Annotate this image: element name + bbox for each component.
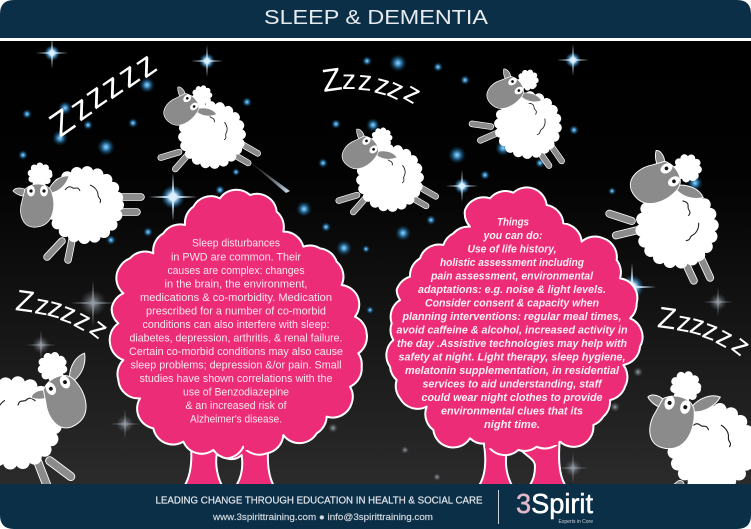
footer strapline: LEADING CHANGE THROUGH EDUCATION IN HEALTH & SOCIAL CARE — [156, 496, 483, 506]
text block: sleep disturbances: diabetes, depression, arthritis, & renal failure. — [130, 333, 342, 345]
text block: sleep disturbances: in PWD are common. Their — [171, 251, 301, 263]
text block: sleep disturbances: conditions can also interfere with sleep: — [142, 319, 330, 331]
header band — [0, 0, 751, 38]
text block: things you can do: adaptations: e.g. noise & light levels. — [418, 284, 606, 296]
snore text: top centre: Zzzzzz — [320, 61, 427, 110]
text block: things you can do: the day .Assistive technologies may help with — [397, 338, 627, 350]
text block: things you can do: Consider consent & capacity when — [425, 298, 599, 310]
text block: things you can do: holistic assessment including — [440, 257, 584, 269]
text block: sleep disturbances: prescribed for a number of co-morbid — [146, 305, 326, 317]
sheep: upper left — [155, 74, 269, 201]
text block: sleep disturbances: causes are complex: changes — [168, 265, 305, 277]
text block: things you can do: you can do: — [483, 230, 543, 242]
text block: things you can do: Things — [497, 217, 529, 229]
sheep: bottom right — [636, 367, 751, 519]
text block: things you can do: avoid caffeine & alcohol, increased activity in — [396, 325, 628, 337]
text block: sleep disturbances: & an increased risk of — [186, 400, 287, 412]
footer — [0, 484, 751, 529]
text block: things you can do: environmental clues that its — [441, 406, 583, 418]
panel: things you can do pink sheep — [386, 187, 643, 485]
footer contact details: www.3spirittraining.com ● info@3spirittraining.com — [212, 512, 433, 523]
text block: things you can do: services to aid understanding, staff — [422, 379, 603, 391]
sheep: bottom left — [0, 342, 111, 500]
text block: sleep disturbances: Certain co-morbid conditions may also cause — [129, 346, 343, 358]
shooting star — [245, 158, 290, 193]
text block: things you can do: melatonin supplementation, in residential — [405, 365, 620, 377]
text block: sleep disturbances: studies have shown correlations with the — [140, 373, 332, 385]
snore text: left: Zzzzzz — [14, 284, 114, 345]
text block: sleep disturbances — [129, 238, 343, 425]
logo: 3Spirit: Experts in Core — [559, 519, 593, 525]
sheep: centre — [333, 116, 447, 244]
text block: things you can do: night time. — [484, 419, 540, 431]
text block: things you can do — [396, 217, 628, 431]
title: SLEEP & DEMENTIA — [264, 7, 489, 29]
snore text: top left: Zzzzzz — [43, 45, 164, 145]
logo: 3Spirit: 3Spirit — [516, 488, 593, 519]
text block: sleep disturbances: Alzheimer's disease. — [190, 413, 282, 425]
text block: sleep disturbances: in the brain, the environment, — [164, 278, 308, 290]
text block: things you can do: pain assessment, environmental — [430, 271, 594, 283]
text block: sleep disturbances: medications & co-morbidity. Medication — [140, 292, 332, 304]
sheep: right — [606, 136, 734, 306]
text block: things you can do: Use of life history, — [468, 244, 556, 256]
text block: sleep disturbances: use of Benzodiazepine — [183, 387, 289, 399]
text block: things you can do: safety at night. Light therapy, sleep hygiene, — [398, 352, 626, 364]
text block: things you can do: planning interventions: regular meal times, — [402, 311, 622, 323]
sheep: left — [13, 166, 141, 260]
text block: things you can do: could wear night clothes to provide — [422, 392, 602, 404]
text block: sleep disturbances: Sleep disturbances — [192, 238, 280, 250]
text block: sleep disturbances: sleep problems; depression &/or pain. Small — [130, 360, 342, 372]
sheep: upper right — [470, 57, 579, 192]
panel: sleep disturbances pink sheep — [110, 190, 367, 485]
